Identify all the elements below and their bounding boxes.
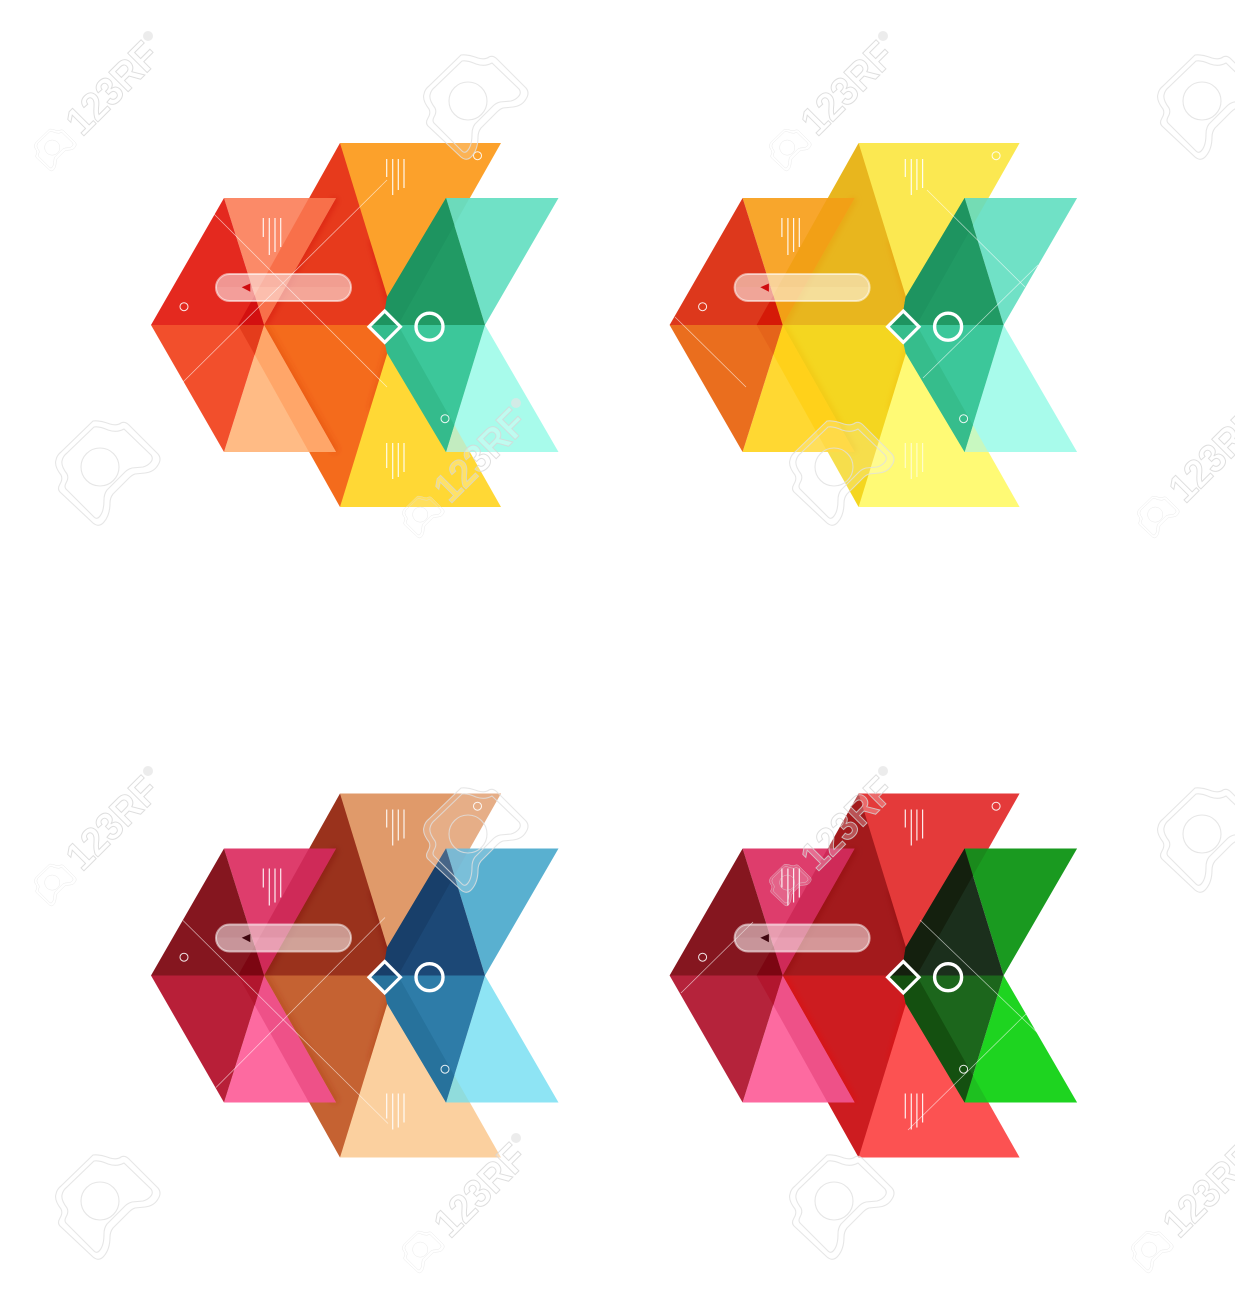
thin diagonal lines [183, 180, 387, 387]
icon: diamond and ring [888, 962, 962, 993]
soft shadows [786, 856, 905, 969]
right arrow top [889, 198, 1077, 325]
icon: small circles [699, 802, 1000, 1073]
right arrow top [370, 198, 558, 325]
right arrow bottom [370, 325, 558, 452]
left bottom facet [670, 976, 855, 1102]
soft shadows [784, 201, 906, 422]
left top facet [670, 848, 855, 976]
icon: small circles [180, 152, 482, 423]
big arrow bottom [238, 976, 501, 1158]
soft shadows [264, 848, 396, 1102]
icon: small circles [180, 802, 482, 1073]
big arrow top [757, 794, 1020, 976]
big arrow bottom [757, 976, 1020, 1158]
mark top right: 123RF [793, 34, 903, 144]
label pill [735, 924, 870, 952]
mark lower left: 123RF [58, 769, 168, 879]
panel: burgundy red green arrow [670, 794, 1077, 1158]
panel: burgundy peach blue arrow [151, 794, 558, 1158]
stripe marks [263, 810, 404, 1130]
mark bottom right [1131, 1133, 1235, 1273]
mark lower left [34, 766, 168, 906]
mark bottom left [402, 1133, 536, 1273]
mark centre right [1137, 398, 1235, 538]
right arrow bottom [370, 976, 558, 1102]
big arrow bottom [238, 325, 501, 507]
label pill [735, 274, 870, 301]
left bottom facet [670, 325, 855, 452]
left bottom facet [151, 325, 336, 452]
mark bottom left: 123RF [426, 1136, 536, 1246]
mark lower right: 123RF [793, 769, 903, 879]
icon: diamond and ring [888, 311, 962, 342]
left top facet [151, 848, 336, 976]
left bottom facet [151, 976, 336, 1102]
thin diagonal lines [675, 190, 1038, 387]
mark centre left [402, 398, 536, 538]
mark top left [34, 31, 168, 171]
right arrow top [370, 848, 558, 976]
right arrow top [889, 848, 1077, 976]
soft shadows [264, 198, 396, 452]
stripe marks [782, 810, 923, 1130]
icon: small circles [699, 152, 1000, 423]
left top facet [151, 198, 336, 325]
thin diagonal lines [681, 920, 1045, 1130]
panel: yellow orange teal arrow [670, 143, 1077, 507]
mark top right [769, 31, 903, 171]
mark centre left: 123RF [426, 401, 536, 511]
left top facet [670, 198, 855, 325]
stripe marks [782, 159, 923, 479]
stripe marks [263, 159, 404, 479]
right arrow bottom [889, 325, 1077, 452]
icon: diamond and ring [369, 962, 443, 993]
big arrow top [238, 143, 501, 325]
mark lower right [769, 766, 903, 906]
mark top left: 123RF [58, 34, 168, 144]
big arrow bottom [757, 325, 1020, 507]
icon: diamond and ring [369, 311, 443, 342]
big arrow top [238, 794, 501, 976]
label pill [216, 274, 351, 301]
thin diagonal lines [183, 918, 388, 1124]
big arrow top [757, 143, 1020, 325]
right arrow bottom [889, 976, 1077, 1102]
panel: orange red teal arrow [151, 143, 558, 507]
label pill [216, 924, 351, 952]
